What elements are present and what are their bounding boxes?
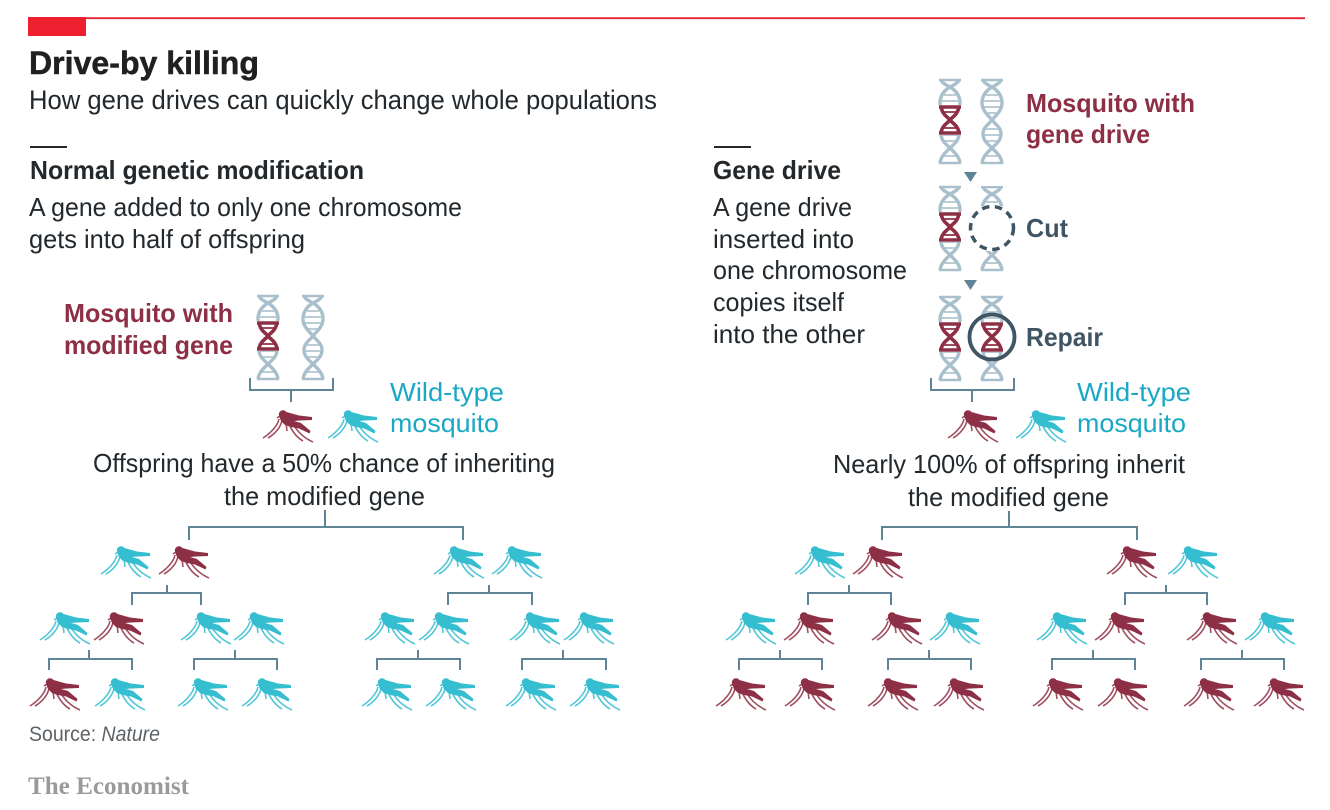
icon: parent mosquitoes [948, 410, 1066, 442]
label: mosquito with gene drive: Mosquito with [1026, 88, 1195, 118]
description [713, 192, 907, 349]
description [29, 192, 462, 254]
label: mosquito with gene drive: gene drive [1026, 119, 1150, 149]
publisher wordmark: The Economist [28, 773, 190, 800]
description: one chromosome [713, 255, 907, 285]
description: A gene drive [713, 192, 852, 222]
icon: DNA cut [938, 187, 1014, 270]
label: mosquito with modified gene [64, 298, 233, 360]
icon: parent mosquitoes [263, 410, 378, 442]
label: wild-type mosquito: Wild-type [390, 377, 504, 407]
caption: offspring nearly 100%: the modified gene [908, 482, 1109, 512]
caption: offspring nearly 100%: Nearly 100% of offspring inherit [833, 449, 1186, 479]
title: Drive-by killing [29, 45, 259, 81]
label: mosquito with modified gene: modified gene [64, 330, 233, 360]
label: mosquito with modified gene: Mosquito with [64, 298, 233, 328]
family tree lines [49, 510, 606, 670]
description: into the other [713, 319, 865, 349]
third generation mosquitoes [30, 678, 620, 710]
heading: normal genetic modification: Normal genetic modification [30, 155, 364, 185]
label: wild-type mosquito [390, 377, 504, 438]
description: inserted into [713, 224, 854, 254]
first generation mosquitoes [101, 546, 542, 578]
label: wild-type mosquito: mosquito [1077, 408, 1186, 438]
subtitle: How gene drives can quickly change whole populations [29, 85, 657, 115]
parent bracket [250, 378, 333, 402]
third generation mosquitoes [716, 678, 1304, 710]
caption: offspring nearly 100% [833, 449, 1186, 512]
description: gets into half of offspring [29, 224, 305, 254]
parent bracket [931, 378, 1014, 402]
description: copies itself [713, 287, 845, 317]
label: mosquito with gene drive [1026, 88, 1195, 149]
source: Source: Nature [29, 723, 160, 746]
second generation mosquitoes [40, 612, 614, 644]
panel: gene drive [713, 80, 1304, 710]
description: A gene added to only one chromosome [29, 192, 462, 222]
label: cut: Cut [1026, 213, 1068, 243]
arrow: down to cut [964, 172, 977, 182]
second generation mosquitoes [726, 612, 1295, 644]
icon: DNA pair with gene drive [938, 80, 1003, 163]
first generation mosquitoes [795, 546, 1218, 578]
caption: offspring 50%: Offspring have a 50% chance of inheriting [93, 448, 555, 478]
heading marker [30, 146, 67, 148]
icon: DNA pair with modified gene [256, 296, 324, 379]
label: wild-type mosquito [1077, 377, 1191, 438]
label: repair: Repair [1026, 322, 1103, 352]
label: wild-type mosquito: Wild-type [1077, 377, 1191, 407]
panel: normal genetic modification [29, 146, 620, 710]
heading: gene drive: Gene drive [713, 155, 841, 185]
label: wild-type mosquito: mosquito [390, 408, 499, 438]
arrow: down to repair [964, 280, 977, 290]
heading marker [714, 146, 751, 148]
caption: offspring 50% [93, 448, 555, 511]
top red rule and tag [28, 17, 1305, 36]
family tree lines [739, 511, 1284, 670]
caption: offspring 50%: the modified gene [224, 481, 425, 511]
icon: DNA repair [938, 297, 1014, 380]
